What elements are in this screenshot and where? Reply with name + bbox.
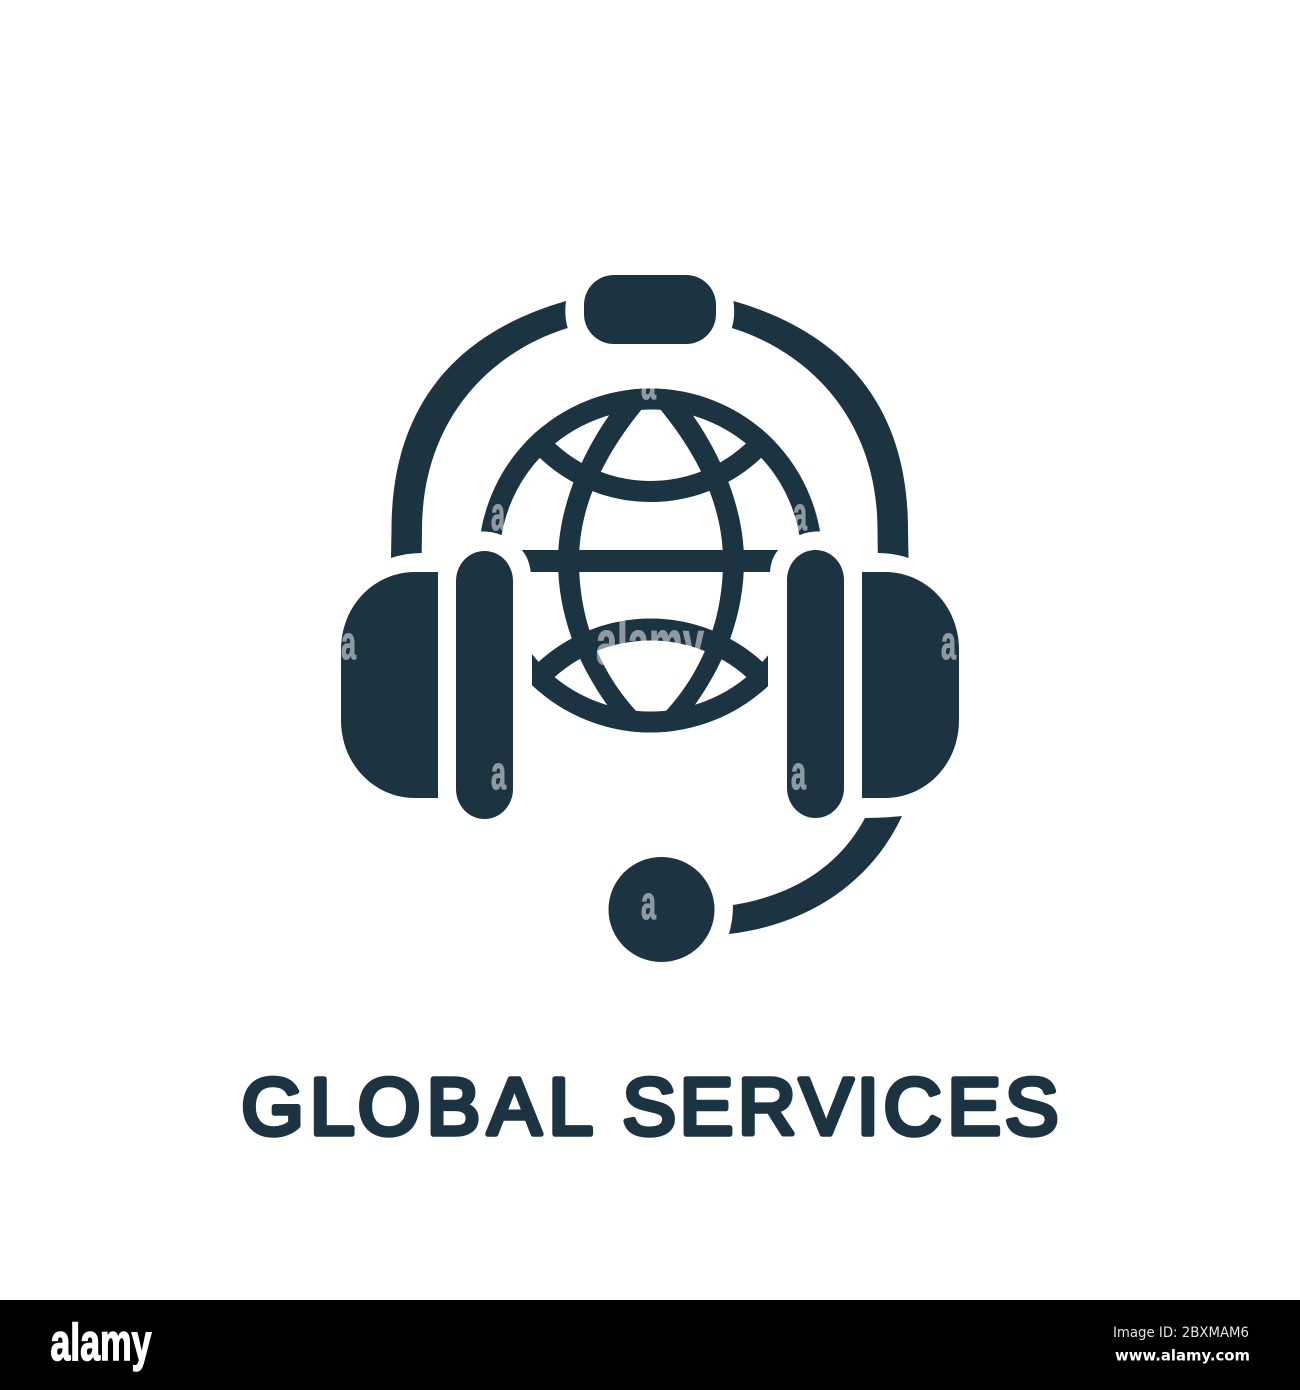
left ear pad <box>456 551 513 819</box>
title: GLOBAL SERVICES <box>242 1062 1058 1151</box>
website: www.alamy.com <box>1115 1347 1250 1365</box>
watermark marks: a <box>941 616 956 669</box>
right ear pad <box>787 550 844 818</box>
footer bar <box>0 1300 1300 1390</box>
equator bar <box>522 550 778 572</box>
watermark marks: a <box>491 746 506 799</box>
globe inner opening <box>579 409 723 712</box>
globe outline <box>489 399 812 722</box>
footer logo: alamy <box>50 1314 152 1372</box>
microphone arm <box>729 816 902 934</box>
lower latitude <box>532 618 768 692</box>
microphone <box>608 857 714 962</box>
icon: headset with globe <box>341 275 959 962</box>
icon: globe <box>481 388 820 732</box>
image id: Image ID: 2BXMAM6 <box>1113 1325 1249 1341</box>
left ear cup <box>341 572 438 798</box>
watermark marks: a <box>341 616 356 669</box>
watermark marks: alamy <box>596 609 704 678</box>
watermark marks: a <box>491 487 505 540</box>
watermark marks: a <box>641 356 656 409</box>
upper latitude <box>526 428 776 502</box>
watermark marks: a <box>641 876 656 929</box>
watermark marks: a <box>793 487 807 540</box>
headband left arc <box>391 301 568 558</box>
headband pad <box>584 275 716 344</box>
watermark marks <box>341 356 956 929</box>
right ear cup <box>862 572 959 798</box>
globe meridians <box>558 385 744 738</box>
headband right arc <box>732 301 908 558</box>
watermark marks: a <box>791 746 806 799</box>
